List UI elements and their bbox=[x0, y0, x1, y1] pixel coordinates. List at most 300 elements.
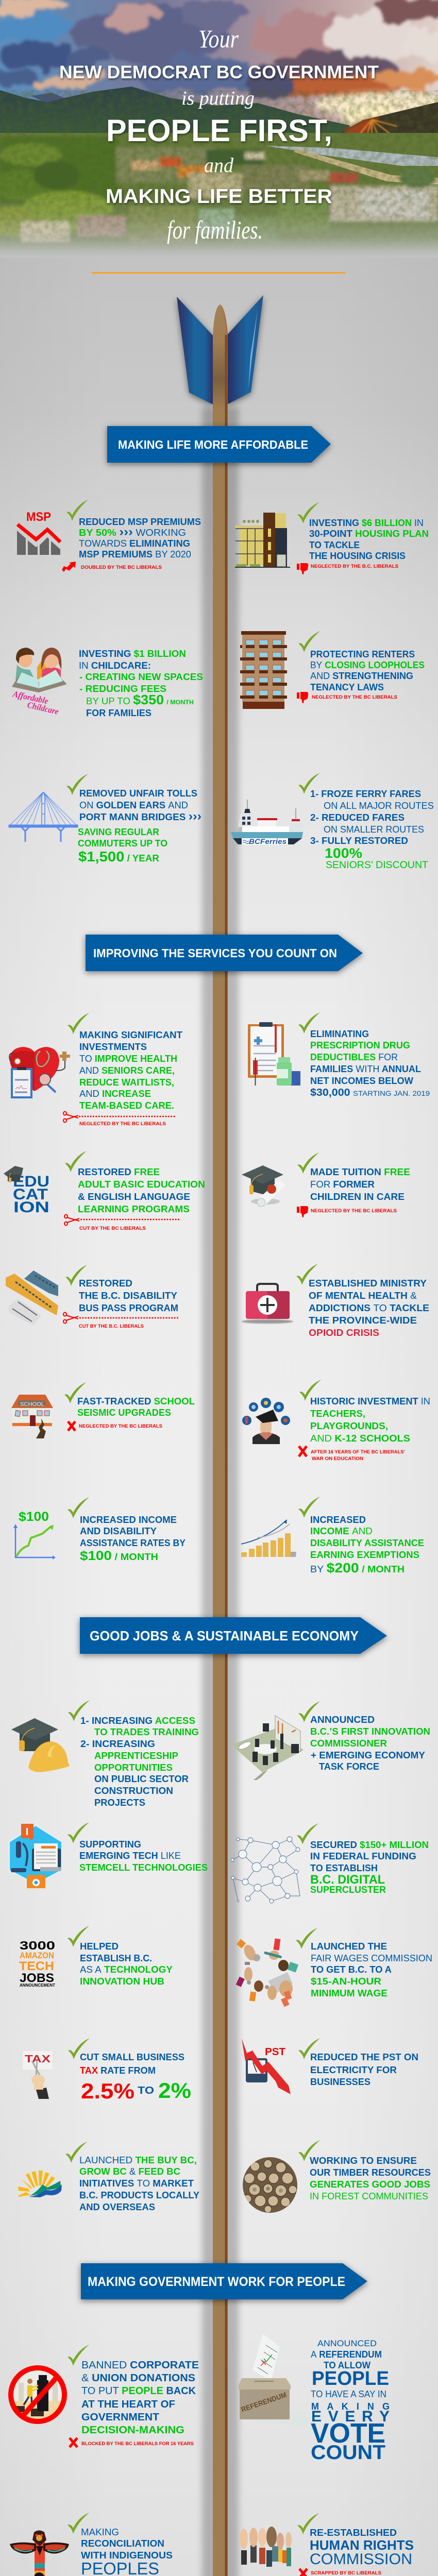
section banner: government for people: MAKING GOVERNMENT WORK FOR PEOPLE bbox=[88, 2275, 345, 2289]
text: emerging tech bbox=[79, 1839, 208, 1873]
text: childcare bbox=[79, 649, 203, 718]
icon: education word with cap: ION bbox=[13, 1199, 49, 1216]
text: innovation bbox=[310, 1715, 430, 1772]
text: school investment: AND K-12 SCHOOLS bbox=[310, 1433, 410, 1444]
text: seismic: SEISMIC UPGRADES bbox=[77, 1408, 171, 1418]
text: fair wages: TO GET B.C. TO A bbox=[311, 1964, 392, 1975]
icon: 3000 amazon tech jobs wordmark: AMAZON bbox=[20, 1951, 54, 1960]
text: renters: AND STRENGTHENING bbox=[310, 671, 413, 681]
text: childcare: INVESTING $1 BILLION bbox=[79, 649, 186, 659]
text: donations: BANNED CORPORATE bbox=[81, 2360, 199, 2371]
panel: small business tax bbox=[22, 2038, 191, 2103]
text: prescriptions: NET INCOMES BELOW bbox=[310, 1076, 413, 1086]
text: education: ADULT BASIC EDUCATION bbox=[78, 1179, 205, 1190]
panel: emerging tech bbox=[9, 1822, 208, 1888]
text: exemptions bbox=[310, 1515, 424, 1575]
text: tolls: $1,500 / YEAR bbox=[78, 849, 159, 865]
text: rates: INCREASED INCOME bbox=[80, 1515, 177, 1525]
text: innovation: TASK FORCE bbox=[319, 1761, 379, 1772]
text: prescriptions: ELIMINATING bbox=[310, 1029, 369, 1039]
text: PST: ELECTRICITY FOR bbox=[310, 2065, 397, 2075]
panel: timber bbox=[242, 2140, 431, 2213]
text: buy BC: LAUNCHED THE BUY BC, bbox=[79, 2155, 197, 2165]
text: school investment: AFTER 16 YEARS OF THE BC LIBERALS’ bbox=[311, 1449, 405, 1455]
section banner: making life more affordable: MAKING LIFE MORE AFFORDABLE bbox=[118, 438, 308, 451]
text: human rights: HUMAN RIGHTS bbox=[310, 2537, 414, 2553]
text: reconciliation: MAKING bbox=[81, 2527, 119, 2537]
icon: check mark bbox=[297, 2513, 319, 2534]
text: prescriptions: DEDUCTIBLES FOR bbox=[310, 1052, 398, 1062]
panel: amazon tech jobs bbox=[19, 1926, 173, 1988]
text: supercluster: IN FEDERAL FUNDING bbox=[310, 1851, 416, 1861]
title text: PEOPLE FIRST, bbox=[106, 113, 332, 148]
icon: electricity meter with falling arrow bbox=[242, 2039, 291, 2094]
panel: housing plan bbox=[235, 502, 429, 574]
icon: working hands circle bbox=[236, 1938, 298, 2007]
panel: bus pass bbox=[6, 1265, 179, 1329]
panel: buy BC bbox=[18, 2142, 199, 2212]
panel: fair wages bbox=[236, 1928, 432, 2007]
text: tolls: COMMUTERS UP TO bbox=[78, 838, 167, 849]
text: tolls: REMOVED UNFAIR TOLLS bbox=[79, 788, 197, 799]
text: ferries bbox=[310, 789, 434, 871]
icon: kids reading book bbox=[12, 648, 67, 692]
text: childcare: IN CHILDCARE: bbox=[79, 660, 151, 671]
text: tax: CUT SMALL BUSINESS bbox=[80, 2052, 184, 2062]
icon: electricity meter with falling arrow: PST bbox=[265, 2046, 285, 2058]
icon: check mark bbox=[66, 500, 88, 521]
icon: people network bbox=[231, 1837, 300, 1903]
text: mental health: ESTABLISHED MINISTRY bbox=[309, 1278, 427, 1289]
text: ferries: SENIORS’ DISCOUNT bbox=[326, 860, 428, 871]
icon: buy BC sunrise bbox=[18, 2171, 62, 2197]
icon: raised hands bbox=[240, 2527, 292, 2567]
icon label: affordable childcare: Affordable bbox=[11, 689, 49, 706]
text: tax: TO bbox=[138, 2085, 154, 2096]
text: renters: BY CLOSING LOOPHOLES bbox=[310, 660, 425, 670]
icon: 3000 amazon tech jobs wordmark: TECH bbox=[19, 1959, 54, 1973]
text: MSP bbox=[62, 517, 201, 572]
text: bus pass: BUS PASS PROGRAM bbox=[79, 1303, 178, 1313]
text: tax: 2.5% bbox=[81, 2079, 134, 2103]
text: donations: & UNION DONATIONS bbox=[81, 2372, 195, 2384]
text: amazon: INNOVATION HUB bbox=[80, 1976, 164, 1987]
icon: check mark bbox=[68, 1497, 89, 1518]
text: bus pass: CUT BY THE B.C. LIBERALS bbox=[79, 1324, 144, 1329]
panel: digital supercluster bbox=[231, 1823, 429, 1903]
icon: check mark bbox=[296, 1264, 318, 1285]
icon: check mark bbox=[298, 1012, 320, 1033]
panel: PST on electricity bbox=[242, 2038, 418, 2094]
text: bus pass bbox=[63, 1278, 179, 1329]
icon: ballot box bbox=[239, 2334, 310, 2427]
text: prescriptions: PRESCRIPTION DRUG bbox=[310, 1040, 410, 1050]
text: fair wages: LAUNCHED THE bbox=[311, 1941, 387, 1952]
text: tuition: NEGLECTED BY THE BC LIBERALS bbox=[311, 1208, 397, 1214]
text: prescriptions: FAMILIES WITH ANNUAL bbox=[310, 1064, 421, 1074]
icon: check mark bbox=[297, 1153, 319, 1174]
text: prescriptions: $30,000 STARTING JAN. 2019 bbox=[310, 1087, 430, 1098]
text: renters: TENANCY LAWS bbox=[310, 682, 384, 692]
icon: education word with cap: EDU bbox=[13, 1173, 49, 1190]
text: prescriptions bbox=[310, 1029, 430, 1098]
text: referendum: E V E R Y bbox=[311, 2408, 390, 2425]
icon: MSP falling chart bbox=[17, 510, 60, 555]
panel: school investment bbox=[242, 1380, 430, 1462]
text: timber: IN FOREST COMMUNITIES bbox=[310, 2191, 428, 2201]
text: referendum bbox=[311, 2338, 390, 2464]
panel: health care bbox=[9, 1013, 182, 1127]
text: fair wages bbox=[311, 1941, 432, 1998]
text: trades: PROJECTS bbox=[94, 1798, 145, 1808]
text: emerging tech: EMERGING TECH LIKE bbox=[79, 1851, 181, 1861]
text: health: AND INCREASE bbox=[79, 1089, 151, 1099]
text: ferries: 3- FULLY RESTORED bbox=[310, 836, 408, 846]
text: supercluster bbox=[310, 1840, 429, 1895]
text: childcare: BY UP TO $350 / MONTH bbox=[86, 692, 194, 707]
icon: check mark bbox=[298, 1701, 320, 1722]
icon: cutting tax bbox=[22, 2050, 53, 2099]
text: renters bbox=[297, 649, 425, 703]
text: timber: GENERATES GOOD JOBS bbox=[310, 2179, 430, 2190]
text: ferries: 2- REDUCED FARES bbox=[310, 812, 405, 823]
icon: check mark bbox=[297, 1823, 318, 1844]
text: tuition: MADE TUITION FREE bbox=[310, 1167, 410, 1177]
icon: cutting tax: TAX bbox=[25, 2054, 51, 2065]
text: supercluster: SUPERCLUSTER bbox=[310, 1885, 386, 1895]
text: donations: AT THE HEART OF bbox=[81, 2399, 175, 2410]
text: tolls bbox=[78, 788, 201, 865]
text: MSP: MSP PREMIUMS BY 2020 bbox=[79, 549, 191, 560]
icon: education word with cap bbox=[4, 1166, 49, 1216]
text: exemptions: EARNING EXEMPTIONS bbox=[310, 1550, 419, 1560]
text: tuition bbox=[297, 1167, 410, 1217]
text: reconciliation: RECONCILIATION bbox=[81, 2538, 164, 2549]
panel: human rights bbox=[240, 2513, 414, 2576]
text: health: REDUCE WAITLISTS, bbox=[79, 1077, 174, 1088]
icon: 3000 amazon tech jobs wordmark bbox=[19, 1939, 55, 1988]
icon: check mark bbox=[297, 502, 319, 523]
text: ferries: ON SMALLER ROUTES bbox=[324, 824, 424, 835]
text: amazon: AS A TECHNOLOGY bbox=[80, 1964, 173, 1975]
text: emerging tech: STEMCELL TECHNOLOGIES bbox=[79, 1862, 208, 1873]
panel: adult education bbox=[4, 1151, 205, 1231]
text: housing bbox=[297, 518, 429, 574]
text: health bbox=[63, 1030, 182, 1127]
panel: prescriptions bbox=[248, 1012, 430, 1098]
section banner: good jobs: GOOD JOBS & A SUSTAINABLE ECONOMY bbox=[90, 1628, 359, 1643]
text: exemptions: INCREASED bbox=[310, 1515, 366, 1525]
text: trades: ON PUBLIC SECTOR bbox=[94, 1774, 189, 1784]
text: childcare: FOR FAMILIES bbox=[86, 708, 151, 718]
icon: check mark bbox=[65, 2142, 87, 2163]
icon: education word with cap: CAT bbox=[13, 1186, 48, 1203]
text: childcare: - CREATING NEW SPACES bbox=[79, 672, 203, 682]
panel: income assistance rates bbox=[13, 1497, 186, 1563]
text: exemptions: BY $200 / MONTH bbox=[310, 1560, 405, 1575]
text: education: RESTORED FREE bbox=[78, 1167, 160, 1177]
icon: heart with stethoscope bbox=[9, 1047, 70, 1098]
text: seismic bbox=[68, 1396, 195, 1431]
text: reconciliation: WITH INDIGENOUS bbox=[81, 2550, 173, 2561]
icon: check mark bbox=[65, 1265, 87, 1286]
text: health: NEGLECTED BY THE BC LIBERALS bbox=[79, 1121, 166, 1127]
section banner: making life more affordable bbox=[107, 426, 331, 463]
text: referendum: PEOPLE bbox=[312, 2368, 389, 2389]
text: ferries: 1- FROZE FERRY FARES bbox=[310, 789, 421, 799]
text: exemptions: INCOME AND bbox=[310, 1526, 373, 1536]
icon: apartment block bbox=[240, 631, 287, 709]
text: seismic: FAST-TRACKED SCHOOL bbox=[77, 1396, 195, 1406]
text: supercluster: SECURED $150+ MILLION bbox=[310, 1840, 429, 1850]
text: buy BC: AND OVERSEAS bbox=[79, 2202, 155, 2212]
panel: tolls bbox=[9, 774, 201, 865]
text: innovation: ANNOUNCED bbox=[310, 1715, 375, 1725]
panel: banned donations bbox=[10, 2345, 199, 2447]
panel: mental health bbox=[242, 1264, 429, 1338]
text: ferries: 100% bbox=[325, 845, 362, 861]
icon: graduate with subject circles bbox=[242, 1398, 290, 1444]
icon: medical kit bbox=[242, 1284, 293, 1324]
panel: innovation commissioner bbox=[231, 1701, 430, 1780]
icon: BC Ferries ship: BCFerries bbox=[249, 837, 287, 845]
text: MSP: REDUCED MSP PREMIUMS bbox=[79, 517, 201, 527]
text: education: LEARNING PROGRAMS bbox=[78, 1204, 190, 1214]
text: trades: 1- INCREASING ACCESS bbox=[80, 1716, 195, 1726]
icon: prohibited chess move bbox=[10, 2368, 65, 2421]
text: mental health: THE PROVINCE-WIDE bbox=[309, 1315, 417, 1326]
text: rates: ASSISTANCE RATES BY bbox=[80, 1538, 186, 1548]
icon: check mark bbox=[68, 1013, 89, 1034]
text: amazon bbox=[80, 1941, 173, 1987]
text: health: TEAM-BASED CARE. bbox=[79, 1100, 174, 1111]
icon: check mark bbox=[298, 2038, 320, 2059]
text: MSP: BY 50% ››› WORKING bbox=[79, 525, 186, 539]
text: housing: 30-POINT HOUSING PLAN bbox=[309, 529, 429, 539]
text: mental health: OF MENTAL HEALTH & bbox=[309, 1291, 417, 1301]
text: timber: OUR TIMBER RESOURCES bbox=[310, 2167, 431, 2178]
icon: coin stacks bbox=[241, 1519, 296, 1557]
icon: lab hexagon bbox=[9, 1824, 62, 1888]
text: trades: CONSTRUCTION bbox=[94, 1786, 173, 1796]
text: renters: NEGLECTED BY THE BC LIBERALS bbox=[312, 694, 397, 700]
panel: childcare bbox=[11, 648, 203, 718]
icon: 3000 amazon tech jobs wordmark: 3000 bbox=[20, 1939, 55, 1952]
text: housing: THE HOUSING CRISIS bbox=[309, 551, 406, 561]
icon: check mark bbox=[68, 1926, 89, 1947]
text: housing: TO TACKLE bbox=[309, 540, 360, 550]
text: donations bbox=[70, 2360, 199, 2447]
text: health: AND SENIORS CARE, bbox=[79, 1065, 175, 1076]
text: innovation: COMMISSIONER bbox=[310, 1738, 387, 1749]
text: seismic: NEGLECTED BY THE BC LIBERALS bbox=[79, 1423, 162, 1429]
text: rates: AND DISABILITY bbox=[80, 1526, 157, 1536]
text: school investment: TEACHERS, bbox=[310, 1409, 365, 1419]
text: amazon: ESTABLISH B.C. bbox=[80, 1953, 152, 1963]
title text: is putting bbox=[181, 88, 255, 109]
text: housing: INVESTING $6 BILLION IN bbox=[309, 518, 424, 528]
title text: NEW DEMOCRAT BC GOVERNMENT bbox=[59, 62, 379, 82]
text: buy BC: B.C. PRODUCTS LOCALLY bbox=[79, 2190, 199, 2200]
section banner: improving services: IMPROVING THE SERVICES YOU COUNT ON bbox=[93, 946, 337, 960]
title text: for families. bbox=[167, 215, 263, 244]
text: fair wages: MINIMUM WAGE bbox=[311, 1988, 388, 1998]
panel: renters bbox=[240, 631, 425, 709]
icon: cap and hard hat bbox=[11, 1718, 70, 1772]
title text: MAKING LIFE BETTER bbox=[106, 185, 332, 208]
text: supercluster: TO ESTABLISH bbox=[310, 1863, 378, 1873]
header photo: mountain town at sunset bbox=[0, 0, 438, 258]
text: mental health bbox=[309, 1278, 429, 1338]
icon: apartment tower bbox=[235, 513, 290, 568]
icon: rising $100 chart: $100 bbox=[19, 1510, 49, 1524]
icon: rising $100 chart bbox=[13, 1510, 56, 1560]
icon: ballot box: REFERENDUM bbox=[240, 2391, 288, 2414]
icon label: affordable childcare bbox=[11, 689, 60, 717]
text: donations: BLOCKED BY THE BC LIBERALS FOR 16 YEARS bbox=[81, 2441, 194, 2447]
text: buy BC: GROW BC & FEED BC bbox=[79, 2166, 180, 2177]
panel: ferries bbox=[231, 773, 434, 871]
text: tuition: FOR FORMER bbox=[310, 1179, 375, 1190]
text: bus pass: RESTORED bbox=[79, 1278, 132, 1289]
text: fair wages: $15-AN-HOUR bbox=[311, 1976, 381, 1987]
text: MSP: DOUBLED BY THE BC LIBERALS bbox=[81, 565, 162, 570]
icon: check mark bbox=[68, 2038, 90, 2059]
text: referendum: TO ALLOW bbox=[324, 2360, 370, 2370]
text: tuition: CHILDREN IN CARE bbox=[310, 1192, 405, 1202]
text: MSP: TOWARDS ELIMINATING bbox=[79, 538, 190, 549]
text: housing: NEGLECTED BY THE B.C. LIBERALS bbox=[311, 564, 398, 569]
text: tolls: PORT MANN BRIDGES ››› bbox=[79, 809, 201, 823]
icon: MSP falling chart: MSP bbox=[26, 510, 51, 524]
orange divider bbox=[92, 272, 345, 274]
icon: 3000 amazon tech jobs wordmark: ANNOUNCEMENT bbox=[20, 1983, 55, 1988]
panel: reconciliation bbox=[10, 2513, 199, 2576]
title text: Your bbox=[198, 24, 239, 53]
text: education bbox=[64, 1167, 205, 1231]
icon: check mark bbox=[296, 1928, 317, 1949]
icon: suspension bridge bbox=[9, 792, 78, 842]
text: buy BC: INITIATIVES TO MARKET bbox=[79, 2178, 194, 2189]
section banner: government for people bbox=[81, 2263, 367, 2299]
icon: BC Ferries ship bbox=[231, 800, 303, 845]
text: rates bbox=[80, 1515, 186, 1563]
text: school investment: WAR ON EDUCATION bbox=[312, 1456, 363, 1462]
text: human rights: SCRAPPED BY BC LIBERALS bbox=[311, 2570, 381, 2576]
text: human rights: COMMISSION bbox=[310, 2551, 412, 2568]
text: health: INVESTMENTS bbox=[79, 1042, 147, 1052]
text: reconciliation bbox=[81, 2527, 199, 2576]
icon: log pile circle bbox=[242, 2157, 298, 2213]
text: rates: $100 / MONTH bbox=[80, 1549, 158, 1563]
text: amazon: HELPED bbox=[80, 1941, 119, 1952]
text: referendum: A REFERENDUM bbox=[311, 2349, 382, 2360]
panel: seismic upgrades bbox=[11, 1382, 195, 1438]
panel: tuition bbox=[242, 1153, 410, 1217]
text: PST: REDUCED THE PST ON bbox=[310, 2052, 418, 2062]
icon label: affordable childcare: Childcare bbox=[26, 700, 60, 717]
panel: MSP premiums bbox=[17, 500, 201, 572]
text: supercluster: B.C. DIGITAL bbox=[310, 1873, 385, 1887]
text: buy BC bbox=[79, 2155, 199, 2212]
text: referendum: VOTE bbox=[311, 2418, 385, 2449]
text: PST bbox=[310, 2052, 418, 2087]
text: fair wages: FAIR WAGES COMMISSION bbox=[311, 1953, 432, 1963]
icon: buses bbox=[6, 1270, 58, 1326]
panel: referendum bbox=[239, 2334, 390, 2464]
icon: meeting room bbox=[231, 1716, 304, 1780]
text: exemptions: DISABILITY ASSISTANCE bbox=[310, 1538, 424, 1548]
text: health: TO IMPROVE HEALTH bbox=[79, 1054, 177, 1064]
text: tax: TAX RATE FROM bbox=[80, 2065, 156, 2076]
section banner: good jobs bbox=[80, 1617, 387, 1654]
icon: totem pole bbox=[10, 2531, 69, 2576]
icon: check mark bbox=[68, 2513, 89, 2534]
text: donations: DECISION-MAKING bbox=[81, 2425, 184, 2436]
text: renters: PROTECTING RENTERS bbox=[310, 649, 415, 659]
text: mental health: OPIOID CRISIS bbox=[309, 1328, 379, 1338]
icon: check mark bbox=[298, 773, 320, 794]
text: trades: OPPORTUNITIES bbox=[94, 1762, 173, 1773]
text: emerging tech: SUPPORTING bbox=[79, 1839, 141, 1850]
text: education: & ENGLISH LANGUAGE bbox=[78, 1192, 190, 1202]
text: innovation: + EMERGING ECONOMY bbox=[311, 1750, 425, 1760]
title text bbox=[59, 24, 379, 244]
text: school investment: PLAYGROUNDS, bbox=[310, 1421, 388, 1431]
text: trades: TO TRADES TRAINING bbox=[94, 1727, 199, 1737]
icon: check mark bbox=[299, 1380, 321, 1401]
panel: trades training bbox=[11, 1700, 199, 1808]
panel: earning exemptions bbox=[241, 1497, 424, 1575]
text: mental health: ADDICTIONS TO TACKLE bbox=[309, 1303, 429, 1313]
icon: cap and diploma bbox=[242, 1165, 286, 1207]
text: donations: GOVERNMENT bbox=[81, 2412, 159, 2423]
icon: check mark bbox=[68, 1822, 89, 1843]
icon: check mark bbox=[298, 631, 320, 652]
icon: check mark bbox=[298, 1497, 320, 1518]
text: tolls: ON GOLDEN EARS AND bbox=[79, 800, 188, 810]
text: ferries: ON ALL MAJOR ROUTES bbox=[324, 801, 434, 811]
icon: cracked school bbox=[11, 1395, 53, 1438]
icon: check mark bbox=[68, 2345, 89, 2366]
text: education: CUT BY THE BC LIBERALS bbox=[79, 1226, 146, 1231]
text: trades: APPRENTICESHIP bbox=[94, 1751, 178, 1761]
text: school investment bbox=[299, 1396, 430, 1462]
text: tolls: SAVING REGULAR bbox=[78, 827, 159, 837]
text: referendum: M A K I N G bbox=[311, 2401, 390, 2412]
icon: check mark bbox=[65, 1151, 87, 1172]
icon: cracked school: SCHOOL bbox=[20, 1401, 44, 1408]
text: innovation: B.C.’S FIRST INNOVATION bbox=[310, 1726, 430, 1737]
text: timber: WORKING TO ENSURE bbox=[310, 2156, 417, 2166]
text: tax bbox=[80, 2052, 191, 2103]
text: timber bbox=[310, 2156, 431, 2201]
icon: check mark bbox=[66, 774, 88, 795]
icon: check mark bbox=[298, 2140, 320, 2161]
icon: check mark bbox=[64, 1382, 86, 1403]
text: trades: 2- INCREASING bbox=[80, 1739, 155, 1749]
title text: and bbox=[204, 154, 234, 177]
section banner: improving services bbox=[86, 935, 363, 971]
text: bus pass: THE B.C. DISABILITY bbox=[79, 1291, 177, 1301]
text: PST: BUSINESSES bbox=[310, 2077, 370, 2087]
text: donations: TO PUT PEOPLE BACK bbox=[81, 2385, 196, 2397]
text: tax: 2% bbox=[158, 2078, 191, 2103]
text: trades bbox=[80, 1716, 199, 1808]
icon: 3000 amazon tech jobs wordmark: JOBS bbox=[20, 1971, 54, 1985]
text: childcare: - REDUCING FEES bbox=[79, 684, 166, 694]
text: school investment: HISTORIC INVESTMENT IN bbox=[310, 1396, 430, 1406]
